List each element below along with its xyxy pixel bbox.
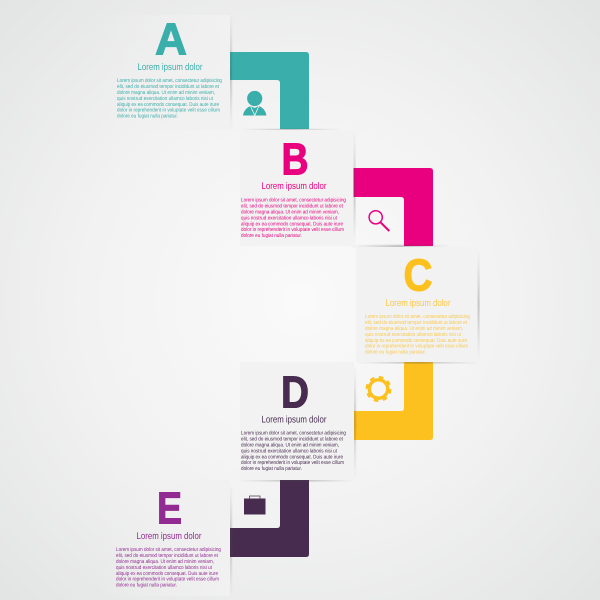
text block C: dolor in reprehenderit in voluptate velit esse cillum xyxy=(365,344,469,350)
letter B: B xyxy=(282,134,308,185)
text block E: dolore eu fugiat nulla pariatur. xyxy=(116,583,177,589)
ribbon: dark purple L-shaped band xyxy=(230,480,309,557)
text block E: dolor in reprehenderit in voluptate velit esse cillum xyxy=(116,577,220,583)
text block D: dolore magna aliqua. Ut enim ad minim veniam, xyxy=(241,442,339,448)
text block A: elit, sed do eiusmod tempor incididunt ut labore et xyxy=(117,84,219,90)
heading D: Lorem ipsum dolor xyxy=(262,414,327,426)
heading E: Lorem ipsum dolor xyxy=(136,531,202,542)
text block E: Lorem ipsum dolor sit amet, consectetur adipisicing xyxy=(116,547,221,553)
heading C: Lorem ipsum dolor xyxy=(386,298,451,309)
text block B: quis nostrud exercitation ullamco laboris nisi ut xyxy=(241,215,337,221)
text block C: aliquip ex ea commodo consequat. Duis aute irure xyxy=(365,338,467,344)
text block D: dolor in reprehenderit in voluptate velit esse cillum xyxy=(241,460,345,466)
text block B: elit, sed do eiusmod tempor incididunt ut labore et xyxy=(241,204,343,210)
text block D: quis nostrud exercitation ullamco laboris nisi ut xyxy=(241,448,337,454)
heading A: Lorem ipsum dolor xyxy=(138,62,203,73)
text block B xyxy=(241,198,346,239)
text block C: dolore magna aliqua. Ut enim ad minim veniam, xyxy=(365,326,463,332)
icon: person xyxy=(243,91,266,116)
text block B: dolore magna aliqua. Ut enim ad minim veniam, xyxy=(241,210,339,216)
panel: E xyxy=(100,480,232,596)
text block A: Lorem ipsum dolor sit amet, consectetur adipisicing xyxy=(117,78,222,84)
text block C: quis nostrud exercitation ullamco laboris nisi ut xyxy=(365,332,461,338)
letter C: C xyxy=(404,250,432,301)
panel: A xyxy=(100,14,340,131)
text block A: quis nostrud exercitation ullamco laboris nisi ut xyxy=(117,96,213,102)
panel: C xyxy=(356,247,479,400)
panel: D xyxy=(240,362,356,514)
text block E: dolore magna aliqua. Ut enim ad minim veniam, xyxy=(116,559,214,565)
text block B: aliquip ex ea commodo consequat. Duis aute irure xyxy=(241,221,343,227)
text block A: aliquip ex ea commodo consequat. Duis aute irure xyxy=(117,102,219,108)
letter A: A xyxy=(155,14,187,65)
text block D: aliquip ex ea commodo consequat. Duis aute irure xyxy=(241,454,343,460)
text block C: dolore eu fugiat nulla pariatur. xyxy=(365,350,426,356)
icon: briefcase xyxy=(244,496,266,514)
text block D: dolore eu fugiat nulla pariatur. xyxy=(241,466,302,472)
ribbon: teal L-shaped band xyxy=(230,52,309,129)
ribbon: yellow L-shaped band xyxy=(354,362,433,440)
text block A xyxy=(117,78,222,120)
text block E: quis nostrud exercitation ullamco laboris nisi ut xyxy=(116,565,212,571)
letter D: D xyxy=(281,367,309,418)
text block B: dolore eu fugiat nulla pariatur. xyxy=(241,233,302,239)
text block A: dolore magna aliqua. Ut enim ad minim veniam, xyxy=(117,90,215,96)
text block C: elit, sed do eiusmod tempor incididunt ut labore et xyxy=(365,320,467,326)
text block D xyxy=(241,431,346,472)
text block D: elit, sed do eiusmod tempor incididunt ut labore et xyxy=(241,437,343,443)
text block D: Lorem ipsum dolor sit amet, consectetur adipisicing xyxy=(241,431,346,437)
icon: gear xyxy=(367,378,390,400)
text block E xyxy=(116,547,221,589)
text block B: Lorem ipsum dolor sit amet, consectetur adipisicing xyxy=(241,198,346,204)
ribbon: pink L-shaped band xyxy=(353,168,433,246)
text block C xyxy=(365,314,470,356)
text block E: elit, sed do eiusmod tempor incididunt ut labore et xyxy=(116,553,218,559)
text block A: dolore eu fugiat nulla pariatur. xyxy=(117,114,178,120)
heading B: Lorem ipsum dolor xyxy=(262,181,327,192)
text block E: aliquip ex ea commodo consequat. Duis aute irure xyxy=(116,571,218,577)
letter E: E xyxy=(157,483,182,534)
text block B: dolor in reprehenderit in voluptate velit esse cillum xyxy=(241,227,345,233)
panel: B xyxy=(240,130,450,247)
icon: magnifier xyxy=(369,211,389,231)
text block A: dolor in reprehenderit in voluptate velit esse cillum xyxy=(117,108,221,114)
text block C: Lorem ipsum dolor sit amet, consectetur adipisicing xyxy=(365,314,470,320)
